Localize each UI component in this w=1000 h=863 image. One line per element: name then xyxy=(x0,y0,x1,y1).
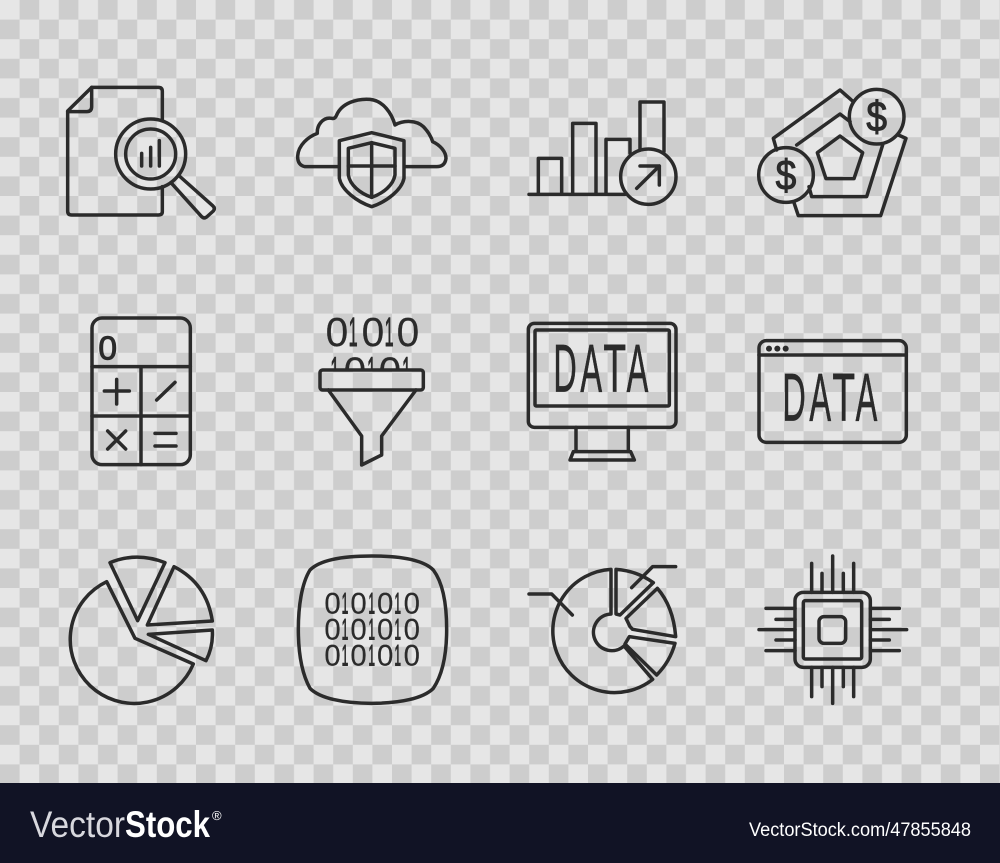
icon: browser window with DATA: A xyxy=(856,361,877,436)
icon: binary code in rounded square: 1 xyxy=(368,640,375,673)
icon: binary data funnel: 1 xyxy=(367,348,376,394)
icon: computer monitor with DATA: A xyxy=(627,332,648,407)
icon: exploded pie chart xyxy=(70,557,212,703)
icon: binary code in rounded square: 0 xyxy=(404,588,420,621)
icon: binary code in rounded square: 1 xyxy=(342,614,348,647)
icon: binary code in rounded square: 0 xyxy=(324,640,341,673)
icon: binary data funnel xyxy=(320,309,423,465)
icon: binary code in rounded square: 0 xyxy=(404,640,420,673)
icon: computer monitor with DATA: D xyxy=(553,332,577,407)
icon: binary code in rounded square: 0 xyxy=(350,640,367,673)
icon: computer monitor with DATA xyxy=(528,323,676,460)
footer image id: VectorStock.com/47855848 xyxy=(749,820,971,841)
icon: binary code in rounded square: 0 xyxy=(324,614,341,647)
icon: browser window with DATA xyxy=(759,341,906,442)
icon: computer monitor with DATA: A xyxy=(580,332,602,407)
icon: document with magnifier xyxy=(68,87,214,218)
icon: binary data funnel: 1 xyxy=(349,309,358,355)
icon: binary code in rounded square: 1 xyxy=(394,614,401,647)
icon: binary data funnel: 0 xyxy=(362,309,384,355)
icon: pentagon chart with dollar coins: $ xyxy=(776,151,797,199)
icon: binary code in rounded square: 1 xyxy=(368,614,375,647)
icon: processor chip xyxy=(759,556,907,703)
icon: binary code in rounded square: 0 xyxy=(350,588,367,621)
footer bar xyxy=(0,783,1000,863)
icon: binary code in rounded square: 1 xyxy=(342,588,348,621)
icon: pentagon chart with dollar coins: $ xyxy=(866,93,887,141)
icon: browser window with DATA: T xyxy=(832,361,855,436)
icon: binary data funnel: 0 xyxy=(379,348,401,394)
icon: browser window with DATA: A xyxy=(809,361,831,436)
icon: binary code in rounded square: 1 xyxy=(368,588,375,621)
icon: binary code in rounded square: 0 xyxy=(404,614,420,647)
icon: browser window with DATA: D xyxy=(782,361,806,436)
icon: donut chart with callouts xyxy=(529,567,676,693)
icon: binary data funnel: 0 xyxy=(344,348,366,394)
icon: cloud with shield xyxy=(298,99,446,207)
icon: computer monitor with DATA: T xyxy=(603,332,626,407)
icon: binary code in rounded square: 0 xyxy=(377,588,393,621)
icon: binary data funnel: 1 xyxy=(330,348,339,394)
icon: binary code in rounded square xyxy=(298,556,447,703)
icon: binary data funnel: 1 xyxy=(385,309,394,355)
icon: binary code in rounded square: 0 xyxy=(377,614,393,647)
footer logo xyxy=(30,804,222,845)
icon: binary code in rounded square: 1 xyxy=(394,640,401,673)
icon: binary code in rounded square: 1 xyxy=(342,640,348,673)
icon: calculator xyxy=(92,318,190,465)
icon: binary code in rounded square: 0 xyxy=(377,640,393,673)
icon: rising bar chart with arrow xyxy=(529,102,676,204)
icon: binary code in rounded square: 0 xyxy=(324,588,341,621)
footer logo: Stock xyxy=(125,804,210,845)
icon: binary code in rounded square: 0 xyxy=(350,614,367,647)
icon: calculator: 0 xyxy=(98,331,117,368)
icon: binary data funnel: 0 xyxy=(397,309,419,355)
footer logo: Vector xyxy=(30,804,125,845)
icon: binary data funnel: 1 xyxy=(402,348,411,394)
footer logo: ® xyxy=(212,808,222,823)
icon: pentagon chart with dollar coins xyxy=(759,89,906,216)
icon: binary code in rounded square: 1 xyxy=(394,588,401,621)
icon: binary data funnel: 0 xyxy=(326,309,348,355)
